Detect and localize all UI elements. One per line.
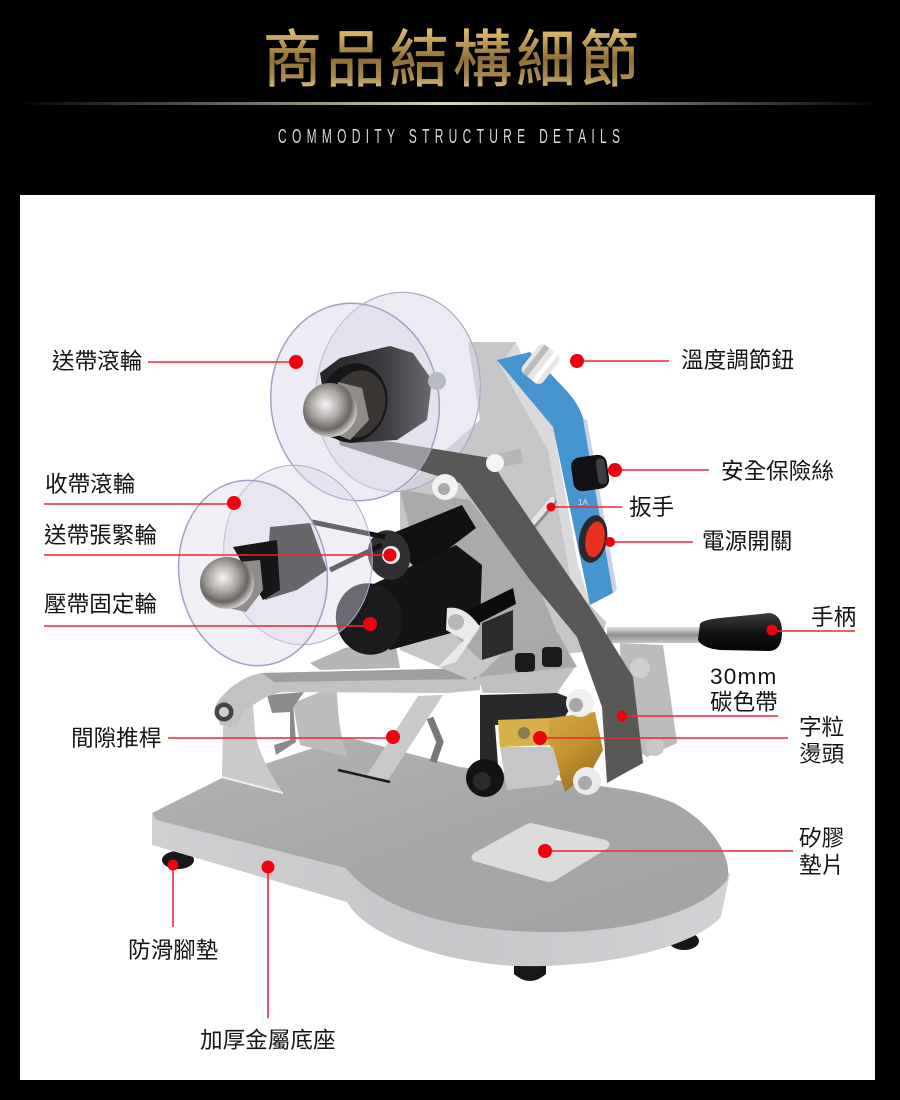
upper reel rear disc [303,282,493,502]
ribbon band [338,438,643,783]
heater dark core [480,693,575,775]
temperature knob [519,342,562,386]
white panel [20,195,875,1080]
bolt [490,456,522,462]
subtitle: COMMODITY STRUCTURE DETAILS [278,126,620,148]
silicone pad [472,823,610,882]
callout labels: 扳手 [629,495,674,520]
push rod [367,695,443,780]
power switch [575,513,611,565]
fixed pressure roller [328,576,410,662]
upper nut [303,382,369,440]
callout labels: 加厚金屬底座 [200,1028,336,1053]
fuse holder [570,454,610,492]
clamp bar [452,588,516,632]
callout labels: 燙頭 [799,742,845,767]
right bracket [620,643,677,757]
white bushings [432,454,504,500]
callout labels: 字粒 [799,715,844,740]
upper reel front disc [258,292,452,512]
callout labels: 碳色帶 [710,690,778,715]
handle [607,613,782,651]
callout labels: 送帶滾輪 [52,349,142,374]
callout labels: 矽膠 [799,826,844,851]
print head [466,633,664,797]
title: 商品結構細節 [263,25,643,94]
arm [215,668,480,728]
machine illustration [152,282,782,981]
lower reel front disc [167,471,339,675]
chain [430,718,440,762]
control panel: 1A [578,498,588,507]
lower nut [200,557,263,612]
callout lines and dots [44,354,855,1018]
brass block [498,712,603,792]
pillar and front arm [214,640,480,793]
callout labels: 壓帶固定輪 [44,592,157,617]
tension roller [362,525,416,585]
top plate [478,633,577,680]
callout labels: 收帶滾輪 [45,472,135,497]
rubber feet [162,851,699,981]
lower reel hub [233,523,327,600]
lever wrench [533,500,552,524]
housing body [400,342,606,680]
spring and bracket [267,692,304,713]
callout labels: 安全保險絲 [721,459,834,484]
callout labels: 間隙推桿 [71,726,161,751]
callout labels: 手柄 [811,605,856,630]
upper reel hub [310,346,446,450]
header [15,25,885,148]
temperature knob on head [466,759,504,797]
callout labels [44,348,856,1053]
control panel [490,342,617,605]
left pillar block [222,705,283,793]
callout labels: 防滑腳墊 [128,938,218,963]
right pillar wing [293,692,348,757]
metal clip [500,747,560,790]
callout labels: 電源開關 [702,529,792,554]
lever cylinders [312,505,516,668]
metal base [152,737,730,966]
callout labels: 送帶張緊輪 [44,523,157,548]
lower reel rear disc [212,456,384,654]
callout labels: 溫度調節鈕 [681,348,794,373]
callout labels: 墊片 [799,853,844,878]
callout labels: 30mm [710,664,778,689]
